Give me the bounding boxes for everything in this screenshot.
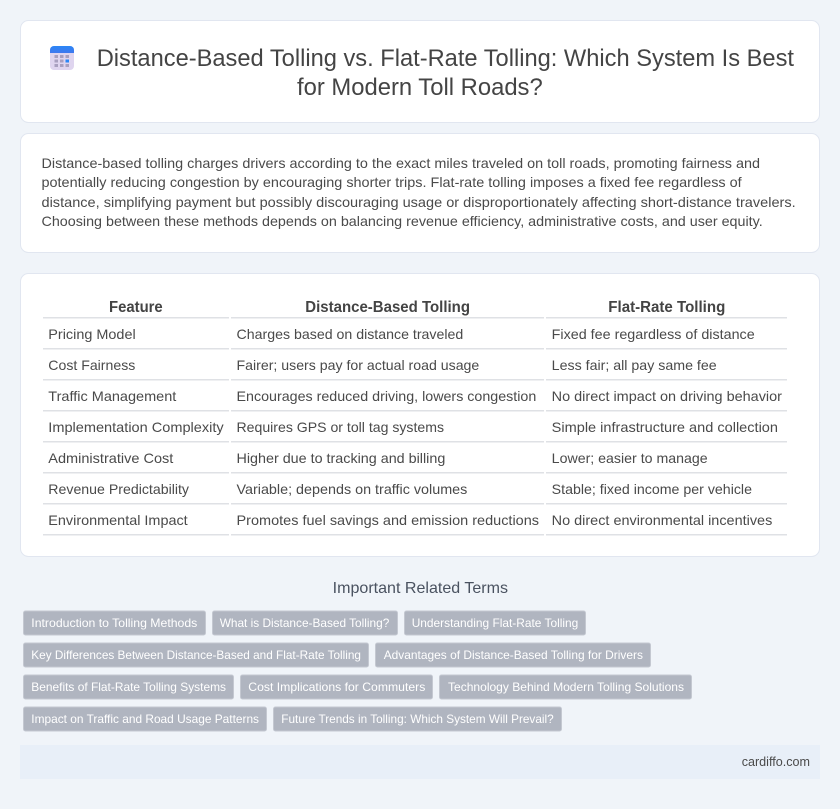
row: cost fairness	[48, 357, 717, 373]
tag: Introduction to Tolling Methods	[31, 616, 197, 630]
summary text	[42, 155, 796, 229]
tag	[24, 675, 234, 699]
row: traffic management: Traffic Management	[48, 388, 176, 404]
row: revenue predictability: Stable; fixed income per vehicle	[552, 481, 752, 497]
tag	[404, 611, 586, 635]
tag: What is Distance-Based Tolling?	[220, 616, 390, 630]
summary text: distance, simplifying payment but possibly discouraging usage or disproportionately affecting short-distance travelers.	[42, 194, 796, 210]
footer bar	[20, 745, 820, 779]
row: environmental impact: Environmental Impact	[48, 512, 188, 528]
table grid lines	[43, 317, 787, 536]
row: pricing model: Charges based on distance traveled	[236, 326, 463, 342]
row: pricing model	[48, 326, 755, 342]
row: pricing model: Pricing Model	[48, 326, 136, 342]
tag	[376, 643, 650, 667]
icon: calendar	[50, 46, 74, 70]
row: revenue predictability	[48, 481, 752, 497]
row: administrative cost: Administrative Cost	[48, 450, 173, 466]
tag	[274, 707, 562, 731]
row: implementation complexity	[48, 419, 778, 435]
tag: Technology Behind Modern Tolling Solutions	[448, 680, 684, 694]
tag	[440, 675, 692, 699]
row: environmental impact: No direct environmental incentives	[552, 512, 772, 528]
title: for Modern Toll Roads?	[297, 74, 543, 101]
row: administrative cost	[48, 450, 708, 466]
tag	[24, 611, 206, 635]
panel: comparison table	[20, 274, 820, 556]
footer source text: cardiffo.com	[742, 754, 810, 769]
tag: Advantages of Distance-Based Tolling for Drivers	[384, 648, 643, 662]
row: revenue predictability: Variable; depends on traffic volumes	[236, 481, 467, 497]
heading: related terms: Important Related Terms	[333, 580, 508, 597]
tag: Understanding Flat-Rate Tolling	[412, 616, 578, 630]
summary text: Distance-based tolling charges drivers according to the exact miles traveled on toll roads, promoting fairness and	[42, 155, 760, 171]
row: administrative cost: Lower; easier to manage	[552, 450, 708, 466]
summary text: potentially reducing congestion by encouraging shorter trips. Flat-rate tolling imposes a fixed fee regardless of	[42, 174, 742, 190]
row: traffic management	[48, 388, 782, 404]
row: traffic management: No direct impact on driving behavior	[552, 388, 782, 404]
row: environmental impact: Promotes fuel savings and emission reductions	[236, 512, 539, 528]
table header row: Flat-Rate Tolling	[608, 299, 725, 316]
title	[97, 45, 794, 101]
tag	[24, 707, 266, 731]
tag	[212, 611, 398, 635]
row: cost fairness: Less fair; all pay same fee	[552, 357, 717, 373]
tag	[240, 675, 432, 699]
row: revenue predictability: Revenue Predictability	[48, 481, 189, 497]
tag	[24, 643, 368, 667]
tag: Future Trends in Tolling: Which System Will Prevail?	[281, 712, 554, 726]
row: implementation complexity: Requires GPS or toll tag systems	[236, 419, 444, 435]
row: implementation complexity: Simple infrastructure and collection	[552, 419, 778, 435]
row: pricing model: Fixed fee regardless of distance	[552, 326, 755, 342]
summary text: Choosing between these methods depends on balancing revenue efficiency, administrative costs, and user equity.	[42, 213, 763, 229]
row: environmental impact	[48, 512, 772, 528]
related term tags	[24, 611, 692, 731]
tag: Key Differences Between Distance-Based and Flat-Rate Tolling	[31, 648, 361, 662]
tag: Impact on Traffic and Road Usage Patterns	[31, 712, 259, 726]
tag: Benefits of Flat-Rate Tolling Systems	[31, 680, 226, 694]
row: cost fairness: Fairer; users pay for actual road usage	[236, 357, 480, 373]
table header row: Feature	[109, 299, 163, 316]
panel: summary paragraph	[20, 134, 820, 252]
title: Distance-Based Tolling vs. Flat-Rate Tolling: Which System Is Best	[97, 45, 794, 72]
row: administrative cost: Higher due to tracking and billing	[236, 450, 445, 466]
table header row: Distance-Based Tolling	[305, 299, 470, 316]
row: cost fairness: Cost Fairness	[48, 357, 135, 373]
tag: Cost Implications for Commuters	[248, 680, 425, 694]
panel: title header	[20, 20, 820, 122]
table header row	[109, 299, 725, 316]
row: traffic management: Encourages reduced driving, lowers congestion	[236, 388, 536, 404]
row: implementation complexity: Implementation Complexity	[48, 419, 224, 435]
